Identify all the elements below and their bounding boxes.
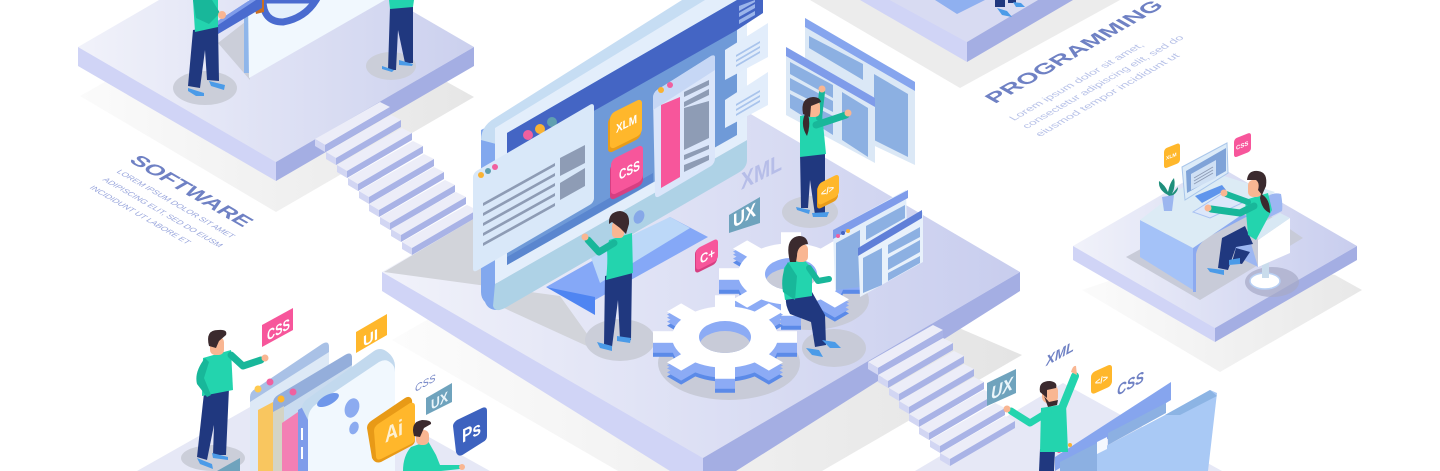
window: back window, woman — [805, 18, 915, 165]
magnifier board — [207, 0, 385, 80]
icon: back gear — [719, 232, 863, 330]
small window: upper — [725, 23, 768, 80]
platform shadow: right — [1082, 250, 1362, 372]
label: CSS right: CSS — [1117, 368, 1144, 400]
icon: CSS badge — [610, 144, 643, 201]
panel: right desk platform — [1073, 132, 1357, 342]
window: rear app window — [250, 343, 329, 471]
heading: programming: PROGRAMMING — [980, 0, 1169, 107]
icon: UX tag, right: UX — [991, 373, 1014, 405]
text block: software line 1: LOREM IPSUM DOLOR SIT AMET — [114, 168, 237, 240]
icon: UX tag, bottom — [217, 458, 240, 471]
figure: center man — [582, 211, 655, 361]
figure: man at bottom — [403, 420, 465, 471]
chair shadow — [1245, 267, 1299, 297]
panel: top right platform — [860, 0, 1073, 62]
window: second app window — [273, 354, 352, 471]
label: XML right: XML — [1045, 338, 1074, 370]
gear shadows — [749, 270, 869, 330]
text block: software line 3: INCIDIDUNT UT LABORE ET — [87, 184, 193, 246]
window: right of gears, rear — [833, 190, 908, 290]
small window: lower — [725, 72, 768, 128]
figure: standing woman — [782, 86, 852, 228]
window: right of gears, front — [858, 210, 923, 297]
icon: CSS small — [1234, 132, 1251, 158]
panel: central platform — [382, 86, 1020, 471]
figure feet — [995, 0, 1025, 17]
icon: code badge right: </> — [1095, 372, 1108, 389]
seated woman shadow — [802, 329, 866, 367]
label: XML: XML — [741, 149, 782, 196]
window: right panel on monitor — [653, 55, 715, 197]
icon: code badge: </> — [821, 183, 834, 200]
icon: XLM badge: XLM — [616, 111, 637, 136]
icon: Ps badge — [453, 407, 487, 456]
icon: XLM small: XLM — [1166, 152, 1177, 162]
icon: front gear — [653, 295, 797, 393]
text block: programming line 1: Lorem ipsum dolor sit amet, — [1007, 41, 1147, 123]
panel: main monitor — [481, 0, 763, 310]
bottom bar — [507, 173, 653, 265]
figure: woman at desk — [1204, 171, 1272, 275]
icon: C+ badge — [695, 238, 718, 274]
icon: CSS badge: CSS — [619, 158, 640, 184]
window: large code window — [473, 102, 594, 273]
icon: XLM badge — [608, 98, 642, 154]
keyboard — [1193, 193, 1242, 218]
figure: seated woman — [782, 236, 841, 357]
text block: software line 2: ADIPISCING ELIT, SED DO EIUSM — [100, 176, 225, 249]
icon: code badge right — [1091, 364, 1112, 395]
text block: programming line 2: consectetur adipiscing elit, sed do — [1020, 34, 1188, 131]
icon: C+ badge: C+ — [700, 245, 715, 267]
label: CSS small: CSS — [415, 372, 436, 395]
icon: CSS tag — [262, 308, 293, 347]
icon: UI tag: UI — [363, 326, 378, 351]
platform shadow: center — [392, 295, 1022, 471]
platform shadow: top right — [810, 0, 1120, 88]
icon: code badge — [817, 174, 839, 210]
stairs: right — [868, 325, 1015, 466]
heading: software: SOFTWARE — [124, 152, 258, 230]
icon: CSS tag: CSS — [267, 315, 290, 345]
plant — [1159, 178, 1178, 211]
icon: UX small tag — [426, 383, 452, 415]
chair — [1232, 193, 1290, 289]
panel: bottom right floor — [915, 383, 1222, 471]
monitor shadow — [384, 214, 600, 352]
small monitor — [1182, 143, 1228, 203]
platform shadow: software — [80, 62, 474, 212]
phone — [298, 349, 395, 471]
panel: software platform — [78, 0, 474, 181]
panel: bottom left floor — [137, 372, 490, 471]
floor mat — [1126, 195, 1303, 300]
stairs: left — [315, 102, 477, 255]
icon: CSS small: CSS — [1236, 140, 1248, 152]
window: laptop panel — [1055, 382, 1217, 471]
icon: Ps badge: Ps — [462, 417, 481, 448]
figure: man by phone — [181, 330, 268, 471]
icon: UI tag — [356, 314, 387, 353]
figure: man on right — [366, 0, 416, 80]
monitor stand — [546, 217, 708, 315]
text block: programming line 3: eiusmod tempor incididunt ut — [1033, 52, 1183, 139]
desk — [1140, 170, 1275, 292]
figure: man with magnifier — [173, 0, 237, 105]
monitor header bar — [507, 0, 763, 160]
icon: Ai badge: Ai — [385, 414, 403, 448]
icon: UX tag: UX — [733, 199, 756, 233]
icon: Ai badge — [367, 397, 415, 462]
icon: UX small tag: UX — [431, 389, 448, 414]
window: front window, woman — [786, 47, 875, 163]
figure: bearded man — [1004, 366, 1077, 471]
icon: XLM small — [1164, 143, 1180, 169]
